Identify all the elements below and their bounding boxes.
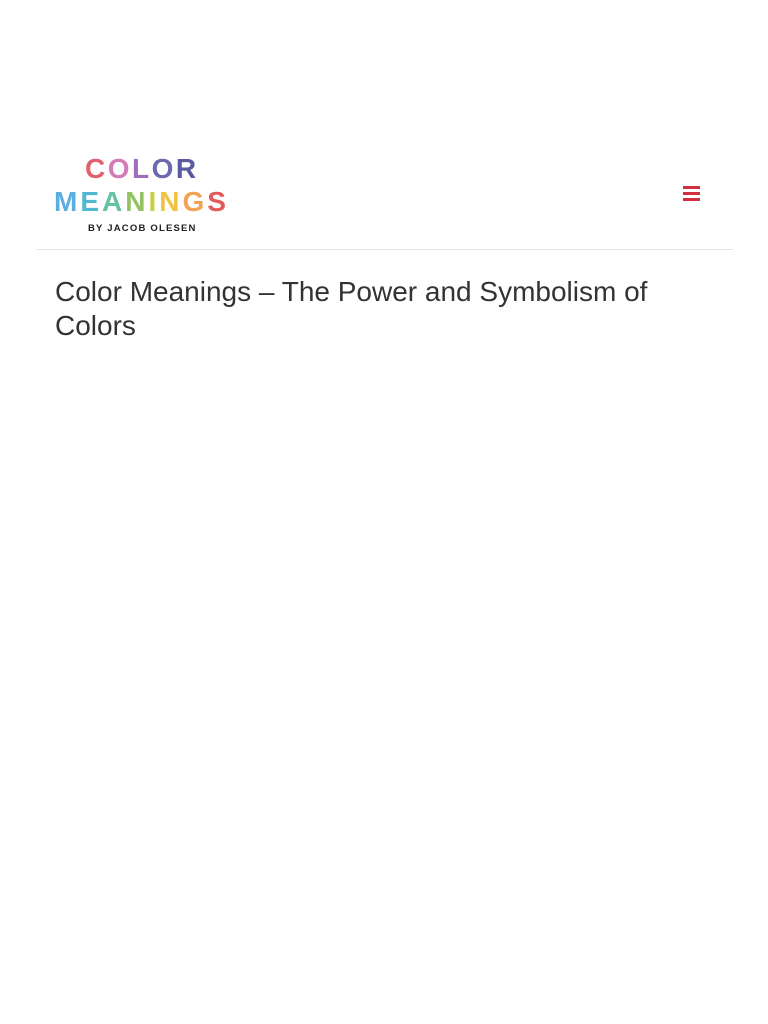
- title: Color Meanings – The Power and Symbolism of Colors: [55, 276, 647, 341]
- icon: hamburger menu: [683, 186, 700, 201]
- logo line: COLOR: COLOR: [85, 153, 199, 184]
- logo: [54, 153, 229, 234]
- logo line: MEANINGS: MEANINGS: [54, 186, 229, 217]
- logo byline: BY JACOB OLESEN: [88, 223, 197, 234]
